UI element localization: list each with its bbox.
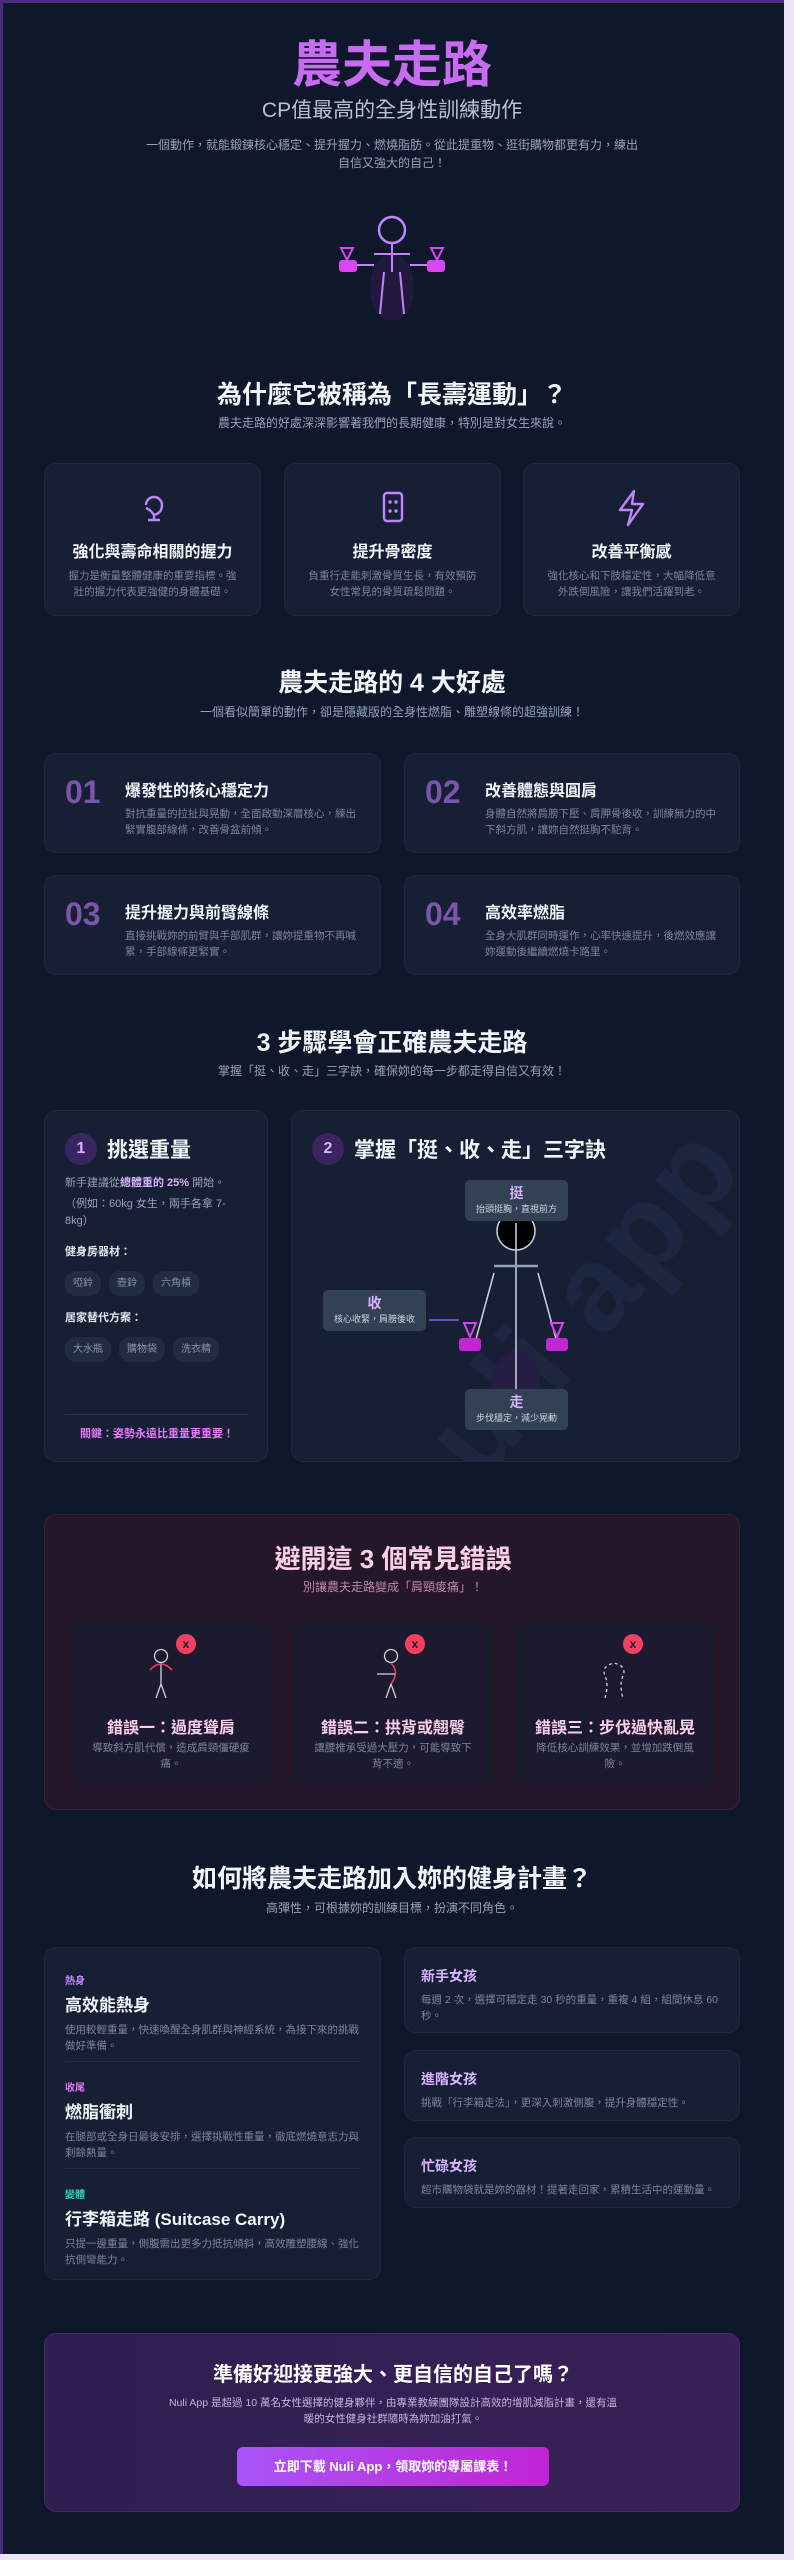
CTA button: 立即下載 Nuli App，領取妳的專屬課表！ [274,2459,512,2474]
mistake 2: x [412,1637,419,1651]
step 1 text [65,1176,226,1362]
role: variant: 行李箱走路 (Suitcase Carry) [65,2210,285,2229]
benefit 02: 身體自然將肩膀下壓、肩胛骨後收，訓練無力的中下斜方肌，讓妳自然挺胸不駝背。 [485,808,716,836]
subtitle: CP值最高的全身性訓練動作 [262,99,522,122]
sub: steps: 掌握「挺、收、走」三字訣，確保妳的每一步都走得自信又有效！ [218,1064,566,1078]
sub: plan: 高彈性，可根據妳的訓練目標，扮演不同角色。 [266,1901,518,1915]
sub: benefits: 一個看似簡單的動作，卻是隱藏版的全身性燃脂、雕塑線條的超強訓練！ [200,705,584,719]
posture figure [429,1221,568,1389]
card: beginner: 新手女孩 [421,1968,477,1984]
benefit 04: 04 [425,896,461,932]
text: bone: 提升骨密度 [352,544,432,561]
mistake 3: x [630,1637,637,1651]
text: grip: 握力是衡量整體健康的重要指標。強壯的握力代表更強健的身體基礎。 [68,570,236,598]
step 1 text: 購物袋 [127,1344,157,1355]
panel: CTA: 準備好迎接更強大、更自信的自己了嗎？ [213,2364,573,2386]
text: balance [548,543,716,598]
panel: balance [523,463,740,616]
benefit 04 [404,875,740,975]
role: variant: 變體 [65,2190,85,2201]
heading: mistakes: 避開這 3 個常見錯誤 [275,1544,511,1574]
step 1 text: （例如：60kg 女生，兩手各拿 7-8kg） [65,1198,226,1227]
benefit 01: 01 [65,774,101,810]
benefit 04: 全身大肌群同時運作，心率快速提升，後燃效應讓妳運動後繼續燃燒卡路里。 [485,930,716,958]
title: 農夫走路 [292,37,492,93]
mistake 3: 降低核心訓練效果，並增加跌倒風險。 [536,1742,694,1770]
mistake 2: 錯誤二：拱背或翹臀 [321,1720,465,1737]
panel: mistakes: 別讓農夫走路變成「肩頸痠痛」！ [303,1580,483,1594]
mistake 1: x [183,1637,190,1651]
role: warmup: 高效能熱身 [65,1996,150,2015]
callout: 挺: 抬頭挺胸，直視前方 [476,1204,557,1214]
card: beginner: 每週 2 次，選擇可穩定走 30 秒的重量，重複 4 組，組間休息 60 秒。 [421,1994,718,2022]
step 1 text: 壺鈴 [117,1278,137,1289]
role: warmup [65,1975,359,2052]
benefit 04: 高效率燃脂 [485,905,565,922]
benefit 01: 對抗重量的拉扯與晃動，全面啟動深層核心，練出緊實腹部線條，改善骨盆前傾。 [125,808,356,836]
mistake 1: 錯誤一：過度聳肩 [107,1720,235,1737]
card: advanced [404,2050,740,2121]
card: busy [404,2137,740,2208]
step 1 text: 大水瓶 [73,1344,103,1355]
callout: 挺 [465,1180,568,1221]
card: busy: 超市購物袋就是妳的器材！提著走回家，累積生活中的運動量。 [421,2184,715,2196]
step 1 text: 居家替代方案： [65,1312,142,1324]
badge 2 [312,1133,344,1165]
hero figure [339,216,445,320]
panel: grip [44,463,261,616]
text: bone: 負重行走能刺激骨質生長，有效預防女性常見的骨質疏鬆問題。 [308,570,476,598]
mistake 3: 錯誤三：步伐過快亂晃 [535,1720,695,1737]
intro text: 一個動作，就能鍛鍊核心穩定、提升握力、燃燒脂肪。從此提重物、逛街購物都更有力，練出自信又強大的自己！ [146,138,638,170]
panel: mistakes [44,1514,740,1810]
panel: bone [284,463,501,616]
icon: grip [144,496,164,522]
callout: 收 [323,1290,426,1331]
heading: benefits: 農夫走路的 4 大好處 [278,669,506,697]
panel: step 1: 挑選重量 [107,1139,191,1162]
mistake 1 [71,1622,271,1784]
benefit 01 [44,753,381,853]
text: bone [308,543,476,598]
step 1 text: 六角槓 [161,1278,191,1289]
panel: plan roles [44,1947,381,2280]
text: balance: 改善平衡感 [591,544,672,561]
callout: 挺: 挺 [510,1185,524,1201]
step 1 text: 啞鈴 [73,1278,93,1289]
role: finisher: 收尾 [65,2083,85,2094]
role: finisher [65,2082,359,2159]
benefit 02: 改善體態與圓肩 [485,783,597,800]
card: advanced: 進階女孩 [421,2071,477,2087]
panel: step 1 [44,1110,268,1462]
role: warmup: 使用較輕重量，快速喚醒全身肌群與神經系統，為接下來的挑戰做好準備。 [65,2024,359,2052]
heading: steps: 3 步驟學會正確農夫走路 [257,1029,527,1057]
icon: bolt [618,490,644,526]
text: grip: 強化與壽命相關的握力 [72,544,232,561]
step 1 text: 新手建議從總體重的 25% 開始。 [65,1177,225,1189]
benefit 03 [44,875,381,975]
callout: 走: 走 [510,1394,524,1410]
role: variant: 只提一邊重量，側腹需出更多力抵抗傾斜，高效雕塑腰線、強化抗側彎能力。 [65,2238,359,2266]
role: variant [65,2189,359,2266]
mistake 1: 導致斜方肌代償，造成肩頸僵硬痠痛。 [92,1742,250,1770]
role: finisher: 燃脂衝刺 [65,2103,133,2122]
mistake 3 [515,1622,715,1784]
card: busy: 忙碌女孩 [421,2158,477,2174]
text: grip [68,543,236,598]
callout: 走 [465,1389,568,1430]
benefit 03: 03 [65,896,101,932]
card: beginner [404,1947,740,2033]
role: finisher: 在腿部或全身日最後安排，選擇挑戰性重量，徹底燃燒意志力與剩餘熱量。 [65,2131,359,2159]
heading: longevity: 為什麼它被稱為「長壽運動」？ [217,381,567,409]
mistake 2: 讓腰椎承受過大壓力，可能導致下背不適。 [314,1742,472,1770]
benefit 02 [404,753,740,853]
badge 2: 2 [324,1140,332,1157]
benefit 03: 直接挑戰妳的前臂與手部肌群，讓妳提重物不再喊累，手部線條更緊實。 [125,930,356,958]
badge 1: 1 [77,1140,85,1157]
benefit 03: 提升握力與前臂線條 [125,905,269,922]
text: balance: 強化核心和下肢穩定性，大幅降低意外跌倒風險，讓我們活躍到老。 [548,570,716,598]
step 1 text: 洗衣精 [181,1344,211,1355]
icon: bone [382,492,404,522]
panel: step 2: 掌握「挺、收、走」三字訣 [354,1139,606,1162]
card: advanced: 挑戰「行李箱走法」，更深入刺激側腹，提升身體穩定性。 [421,2097,689,2109]
sub: longevity: 農夫走路的好處深深影響著我們的長期健康，特別是對女生來說。 [218,416,566,430]
badge 1 [65,1133,97,1165]
CTA button [237,2447,549,2486]
callout: 走: 步伐穩定，減少晃動 [476,1413,557,1423]
step 1 text: 健身房器材： [65,1246,131,1258]
panel: CTA [44,2333,740,2512]
mistake 2 [293,1622,493,1784]
panel: step 2 [291,1110,740,1462]
key note: 關鍵：姿勢永遠比重量更重要！ [80,1428,234,1440]
benefit 01: 爆發性的核心穩定力 [125,783,269,800]
callout: 收: 核心收緊，肩膀後收 [334,1314,415,1324]
benefit 02: 02 [425,774,461,810]
callout: 收: 收 [368,1295,382,1311]
heading: plan: 如何將農夫走路加入妳的健身計畫？ [192,1865,592,1893]
CTA text: Nuli App 是超過 10 萬名女性選擇的健身夥伴，由專業教練團隊設計高效的增肌減脂計畫，還有溫暖的女性健身社群隨時為妳加油打氣。 [169,2397,617,2425]
role: warmup: 熱身 [65,1976,85,1987]
